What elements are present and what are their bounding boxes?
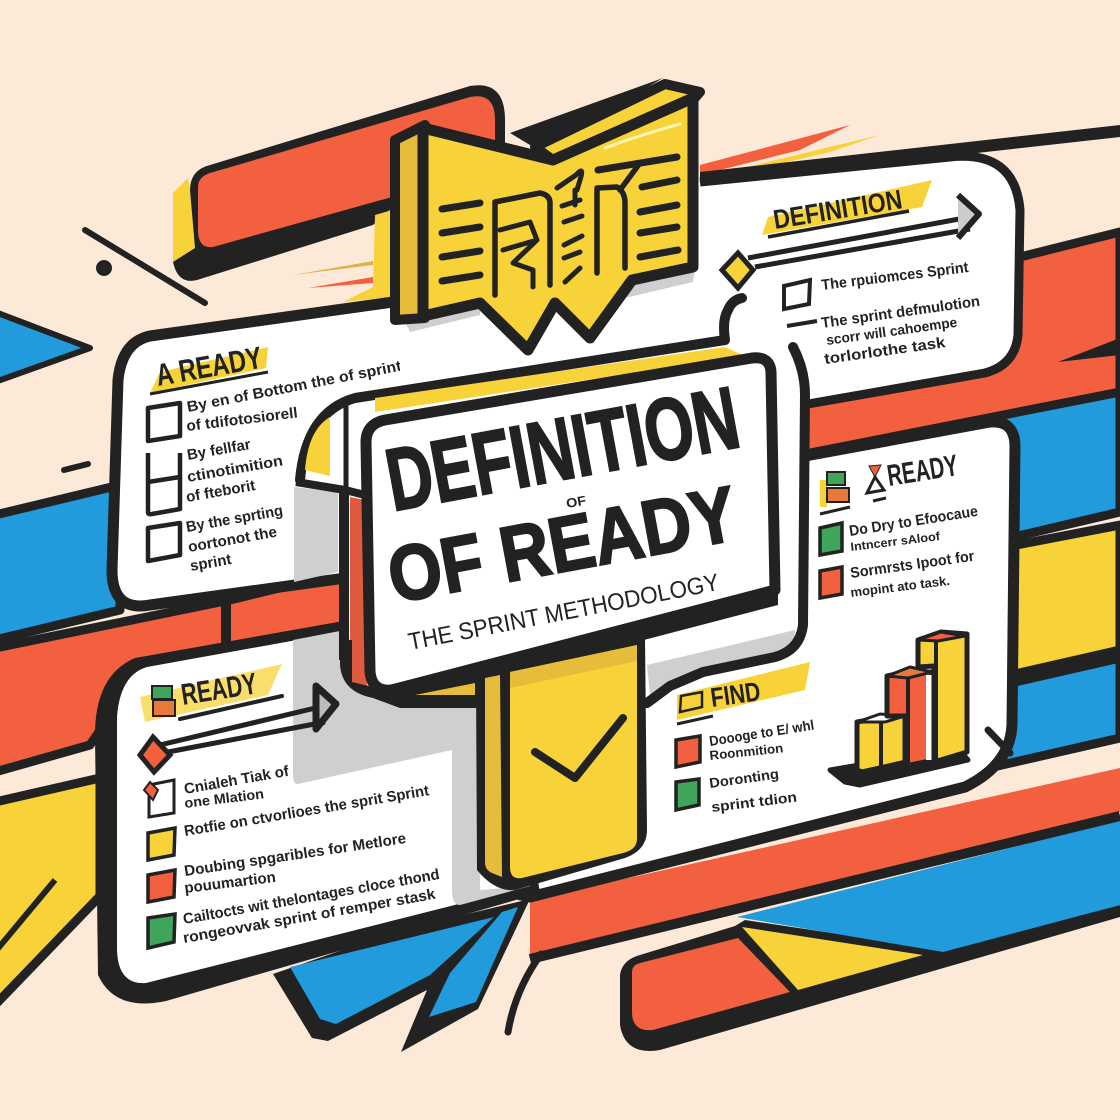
sign bottom edge: [340, 588, 778, 708]
heading: ready: [140, 664, 282, 722]
panel: definition: [400, 156, 1020, 480]
arrow: definition: [722, 195, 979, 288]
checklist: ready list: one Mlation: [183, 785, 265, 811]
left blue arrow fragment: [0, 312, 90, 382]
decorative line and dot: [64, 230, 205, 470]
checklist: a ready: sprint: [189, 551, 233, 575]
background colour bands: [0, 125, 1120, 1005]
title: DEFINITION: [378, 367, 747, 530]
top left red bar: [173, 85, 505, 302]
checklist: ready: Do Dry to Efoocaue: [848, 503, 979, 540]
checklist: find: Roonmition: [709, 740, 784, 763]
center sign back panel: [296, 298, 805, 703]
checklist: ready list: pouumartion: [183, 869, 277, 897]
title: [378, 367, 747, 620]
checklist: definition: The sprint defmulotion: [820, 293, 981, 332]
heading: a ready: A READY: [153, 340, 265, 393]
heading: ready: READY: [885, 449, 960, 493]
checklist: ready: [820, 503, 979, 600]
panel: a ready: [112, 280, 620, 606]
checklist: find: Doronting: [708, 765, 780, 791]
checklist: ready: Intncerr sAloof: [850, 529, 942, 554]
yellow post with check: [476, 638, 647, 890]
checklist: a ready: [148, 358, 403, 575]
checklist: find: Doooge to E/ whl: [708, 717, 815, 749]
checklist: a ready: By the sprting: [185, 502, 284, 536]
checklist: ready list: Rotfie on ctvorlioes the sprit Sprint: [183, 782, 430, 840]
checklist: a ready: of tdifotosiorell: [185, 404, 299, 435]
checklist: ready: Sormrsts Ipoot for: [849, 548, 975, 582]
heading: ready: READY: [179, 667, 259, 712]
checklist: a ready: of fteborit: [185, 477, 257, 506]
checklist: find: [676, 717, 815, 815]
title: OF READY: [381, 469, 743, 620]
center sign: [340, 358, 778, 708]
icon: check mark: [535, 718, 623, 778]
grey drop shadow: lower: [293, 630, 530, 905]
arrow: ready: [140, 686, 336, 772]
checklist: definition: The rpuiomces Sprint: [820, 259, 969, 294]
right arrow fragment: [1058, 338, 1120, 362]
checklist: ready list: Doubing spgaribles for Metlore: [183, 830, 407, 880]
panel: ready and find: [480, 422, 1015, 897]
icon: book banner: [395, 78, 700, 350]
bottom right bar: [620, 820, 1120, 1051]
checklist: definition: torlorlothe task: [823, 334, 947, 368]
checklist: a ready: By en of Bottom the of sprint: [186, 358, 403, 416]
heading: find: FIND: [709, 676, 762, 713]
heading: ready: [820, 449, 960, 514]
panel: ready list: [95, 595, 540, 1004]
checklist: definition: [784, 259, 981, 368]
book text lines: [442, 157, 678, 295]
bottom red band: [530, 768, 1120, 959]
checklist: a ready: By fellfar: [186, 436, 252, 464]
sign front card: [366, 358, 775, 690]
checklist: a ready: ctinotimition: [186, 452, 284, 486]
checklist: definition: scorr will cahoempe: [825, 314, 958, 348]
bar chart: [830, 632, 968, 785]
checklist: ready list: Cnialeh Tiak of: [183, 763, 291, 798]
bottom blue shard: [273, 899, 541, 1052]
checklist: ready list: [144, 763, 441, 948]
checklist: ready: mopint ato task.: [850, 573, 951, 600]
checklist: find: sprint tdion: [710, 789, 798, 815]
heading: definition: DEFINITION: [771, 184, 904, 235]
corner tick: [988, 730, 1010, 753]
checklist: a ready: oortonot the: [187, 524, 278, 556]
checklist: ready list: Cailtocts wit thelontages cloce thond: [182, 866, 441, 928]
small of: OF: [565, 493, 587, 511]
grey drop shadow: upper: [294, 487, 338, 582]
heading: find: [677, 662, 810, 724]
checklist: ready list: rongeovvak sprint of remper stask: [182, 886, 437, 947]
subtitle: THE SPRINT METHODOLOGY: [406, 569, 721, 656]
